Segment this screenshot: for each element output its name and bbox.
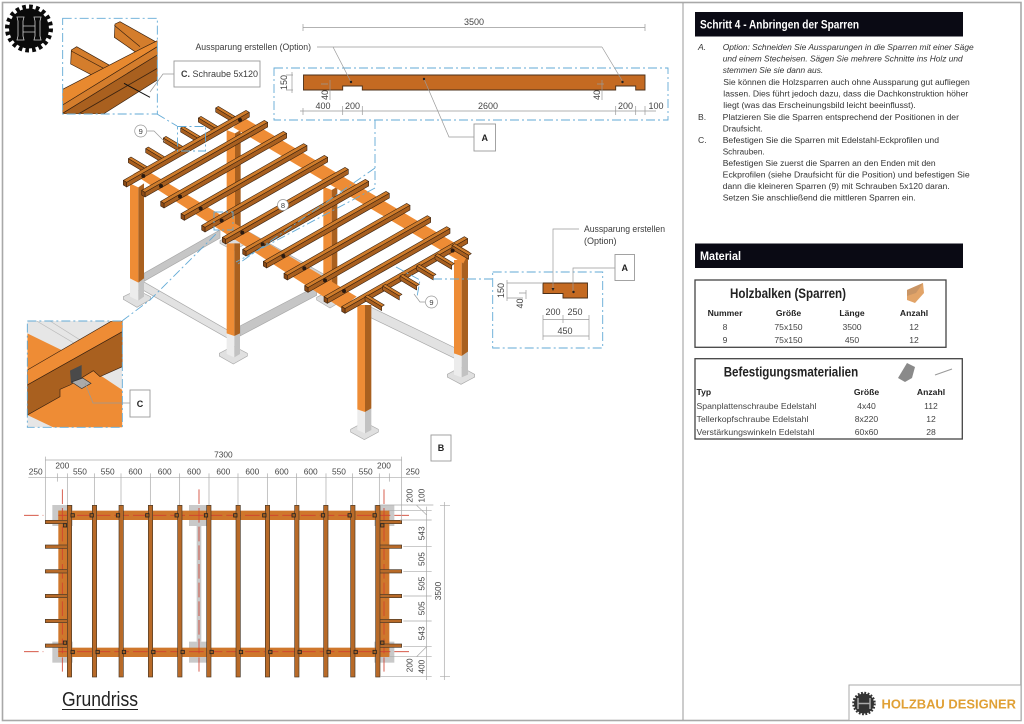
table: Befestigungsmaterialien: Tellerkopfschraube Edelstahl: [696, 414, 809, 424]
table: Holzbalken: 3500: [842, 322, 862, 332]
plan dimension labels: 250: [406, 466, 420, 476]
callout: Aussparung erstellen (Option) right: Aussparung erstellen: [584, 224, 665, 234]
instruction text: Option: Schneiden Sie Aussparungen in die Sparren mit einer Säge: [723, 42, 974, 52]
plan brackets: [63, 514, 384, 654]
table: Holzbalken: 9: [723, 335, 728, 345]
instruction text: Draufsicht.: [723, 124, 763, 134]
panel: rafter elevation detail: 100: [648, 101, 664, 111]
plan dimension labels: 600: [158, 466, 172, 476]
table: Holzbalken: Nummer: [708, 308, 743, 318]
part label 9 rear: 9: [139, 127, 143, 136]
part label 9 front: [414, 294, 438, 308]
plan dimension labels: 100: [416, 488, 426, 503]
instruction text: Sie können die Holzsparren auch ohne Aussparung gut aufliegen: [723, 77, 970, 87]
rafter elevation: [304, 75, 645, 90]
middle front post with footing: [219, 243, 247, 364]
plan dimension labels: 505: [416, 576, 426, 591]
plan dimension labels: 600: [245, 466, 260, 476]
panel: short rafter detail: 250: [567, 307, 583, 317]
heading bar: Schritt 4: Schritt 4 - Anbringen der Sparren: [700, 18, 859, 32]
panel: short rafter detail: 40: [515, 298, 525, 309]
plan dimension labels: 200: [405, 658, 415, 672]
table: Befestigungsmaterialien: Verstärkungswinkeln Edelstahl: [696, 427, 815, 437]
table: Holzbalken: Holzbalken (Sparren): [730, 285, 846, 301]
panel: rafter elevation detail: 200: [618, 101, 633, 111]
blue detail leaders: [122, 114, 492, 321]
callout B plan: [431, 435, 451, 461]
plan dimension labels: 505: [416, 552, 426, 566]
table: Holzbalken: 8: [723, 322, 728, 332]
callout: Aussparung erstellen (Option) right: (Option): [584, 236, 617, 246]
instruction text: [697, 42, 974, 202]
heading bar: Schritt 4: [695, 12, 963, 36]
icon: small saw blade: [854, 693, 874, 714]
callout A section: [572, 254, 634, 293]
icon: saw blade logo: [8, 7, 50, 50]
instruction text: C.: [698, 135, 707, 145]
table: Befestigungsmaterialien: 60x60: [855, 427, 878, 437]
callout A elevation: [423, 78, 496, 151]
part label 9 rear: [135, 125, 165, 142]
table: Holzbalken: 12: [909, 335, 919, 345]
instruction text: B.: [698, 112, 706, 122]
table: Holzbalken: 75x150: [774, 322, 803, 332]
table: Holzbalken: Länge: [839, 308, 865, 318]
panel: rafter elevation detail: 2600: [478, 101, 498, 111]
plan dimension labels: [29, 449, 443, 674]
instruction text: Eckprofilen (siehe Draufsicht für die Position) und befestigen Sie: [723, 170, 970, 180]
plan dimension labels: 600: [216, 466, 231, 476]
part label 8: 8: [281, 201, 285, 210]
heading: Grundriss: Grundriss: [62, 689, 138, 711]
icon: screw: [935, 369, 952, 375]
callout A elevation: A: [481, 133, 488, 143]
table: Holzbalken: Anzahl: [900, 308, 928, 318]
callout: C. Schraube 5x120: [150, 61, 260, 92]
concrete: [52, 505, 394, 663]
table: Holzbalken: 450: [845, 335, 859, 345]
panel: rafter elevation detail: [274, 17, 668, 120]
instruction text: Befestigen Sie die Sparren mit Edelstahl-Eckprofilen und: [723, 135, 939, 145]
panel: short rafter detail: 200: [545, 307, 561, 317]
panel: rafter elevation detail: 40: [592, 90, 602, 100]
instruction text: A.: [697, 42, 706, 52]
icon: timber block: [907, 283, 924, 303]
plan dimension labels: 600: [128, 466, 143, 476]
plan long rafters: [67, 505, 380, 677]
plan dimension labels: 550: [73, 466, 87, 476]
concrete beams rear: [139, 230, 455, 358]
inset: screw detail: [63, 18, 157, 114]
table: Befestigungsmaterialien: Größe: [854, 387, 879, 397]
callout: Aussparung erstellen (Option): Aussparung erstellen (Option): [196, 42, 311, 52]
far corner post with footing: [447, 257, 475, 384]
plan dimension labels: 543: [416, 626, 426, 640]
plan dimension labels: 250: [29, 466, 43, 476]
panel: short rafter detail: 450: [557, 326, 573, 336]
instruction text: lassen. Dies führt jedoch dazu, dass die Dachkonstruktion höher: [723, 88, 968, 98]
callout: Aussparung erstellen (Option): [196, 42, 624, 83]
plan dimension labels: 7300: [214, 449, 233, 459]
table: Befestigungsmaterialien: Spanplattenschraube Edelstahl: [696, 401, 817, 411]
panel divider: [682, 3, 684, 720]
front corner post with footing: [351, 305, 378, 440]
rear posts: [220, 130, 343, 308]
table: Befestigungsmaterialien: Typ: [696, 387, 711, 397]
plan dimension labels: 600: [187, 466, 201, 476]
short rafter section: [543, 283, 588, 298]
instruction text: stemmen Sie sie dann aus.: [723, 65, 823, 75]
table: Befestigungsmaterialien: 112: [924, 401, 938, 411]
instruction text: dann die kleineren Sparren (9) mit Schrauben 5x120 daran.: [723, 181, 950, 191]
table: Befestigungsmaterialien: 12: [926, 414, 936, 424]
plan dimension labels: 200: [405, 488, 415, 503]
short rafters 9 rear: [128, 106, 235, 173]
isometric pergola drawing: [123, 106, 475, 440]
screws on rafters: [141, 118, 455, 293]
table: Befestigungsmaterialien: 8x220: [855, 414, 878, 424]
table: Befestigungsmaterialien: Befestigungsmaterialien: [724, 364, 858, 380]
brand logo box: HOLZBAU DESIGNER: [882, 696, 1017, 712]
corner post left with footing: [123, 183, 151, 307]
plan dimension labels: 550: [332, 466, 346, 476]
plan dimension labels: 543: [416, 526, 426, 540]
panel: rafter elevation detail: 200: [345, 101, 360, 111]
instruction text: Setzen Sie anschließend die mittleren Sparren ein.: [723, 192, 916, 202]
icon: angle bracket: [898, 363, 915, 382]
instruction text: Platzieren Sie die Sparren entsprechend der Positionen in der: [723, 112, 959, 122]
inset: angle bracket detail: [27, 321, 122, 427]
plan dimension labels: 600: [304, 466, 318, 476]
panel: rafter elevation detail: 400: [315, 101, 331, 111]
short rafters 9 front: [365, 244, 471, 311]
table: Holzbalken: 75x150: [774, 335, 803, 345]
heading bar: Material: [695, 244, 963, 268]
table: Holzbalken: 12: [909, 322, 919, 332]
plan short rafters: [45, 520, 402, 647]
longitudinal beams: [133, 117, 469, 308]
brand logo box: [849, 685, 1021, 720]
plan dimension lines: [28, 457, 450, 680]
part label 9 front: 9: [429, 298, 434, 307]
panel: short rafter detail: 150: [496, 283, 506, 298]
table: Holzbalken: Größe: [776, 308, 801, 318]
panel: rafter elevation detail: 150: [279, 75, 289, 90]
plan dimension labels: 200: [377, 460, 391, 470]
callout: Aussparung erstellen (Option) right: [552, 224, 665, 291]
plan dimension labels: 505: [416, 601, 426, 615]
callout A section: A: [621, 263, 628, 273]
plan dimension labels: 600: [275, 466, 289, 476]
callout C bracket: [85, 383, 150, 417]
callout C bracket: C: [137, 399, 144, 409]
instruction text: und einem Stecheisen. Sägen Sie mehrere Schnitte ins Holz und: [723, 54, 963, 64]
table: Befestigungsmaterialien: Anzahl: [917, 387, 945, 397]
table: Holzbalken: [695, 280, 946, 347]
instruction text: Schrauben.: [723, 146, 765, 156]
heading bar: Material: Material: [700, 249, 741, 263]
callout: C. Schraube 5x120: C. Schraube 5x120: [181, 69, 258, 79]
plan dimension labels: 3500: [433, 581, 443, 600]
plan dimension labels: 400: [416, 659, 426, 674]
dimensions: [286, 24, 656, 115]
plan centre lines: [24, 489, 411, 672]
plan dimension labels: 550: [101, 466, 115, 476]
plan beams: [58, 511, 389, 657]
instruction text: Befestigen Sie zuerst die Sparren an den Enden mit den: [723, 158, 936, 168]
panel: rafter elevation detail: 3500: [464, 17, 484, 27]
panel: rafter elevation detail: 40: [320, 90, 330, 100]
table: Befestigungsmaterialien: [695, 359, 962, 439]
plan dimension labels: 200: [55, 460, 70, 470]
instruction text: liegt (was das Erscheinungsbild leicht beeinflusst).: [723, 100, 916, 110]
table: Befestigungsmaterialien: 4x40: [857, 401, 876, 411]
plan dimension labels: 550: [359, 466, 373, 476]
part label 8: [278, 200, 288, 210]
plan view Grundriss: [24, 449, 450, 680]
long rafters 8: [123, 110, 468, 313]
callout B plan: B: [438, 443, 445, 453]
table: Befestigungsmaterialien: 28: [926, 427, 936, 437]
panel: short rafter detail: [493, 272, 603, 348]
